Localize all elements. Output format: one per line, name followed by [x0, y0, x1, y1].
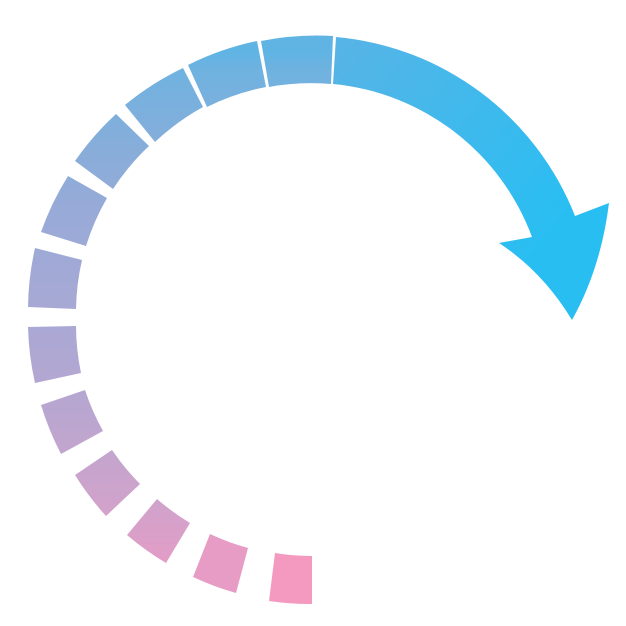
segment 1: [269, 553, 312, 604]
segment 9: [75, 114, 149, 189]
segment 12: [261, 36, 333, 87]
segment 3: [127, 499, 190, 563]
segment 5: [41, 390, 103, 454]
segment 10: [125, 68, 203, 142]
segmented trail: [28, 36, 333, 604]
segment 8: [41, 176, 107, 246]
segment 2: [193, 534, 248, 593]
segment 7: [28, 248, 82, 309]
segment 6: [28, 326, 81, 383]
main arrow: [333, 37, 609, 320]
segment 11: [188, 41, 266, 107]
segment 4: [75, 450, 140, 516]
